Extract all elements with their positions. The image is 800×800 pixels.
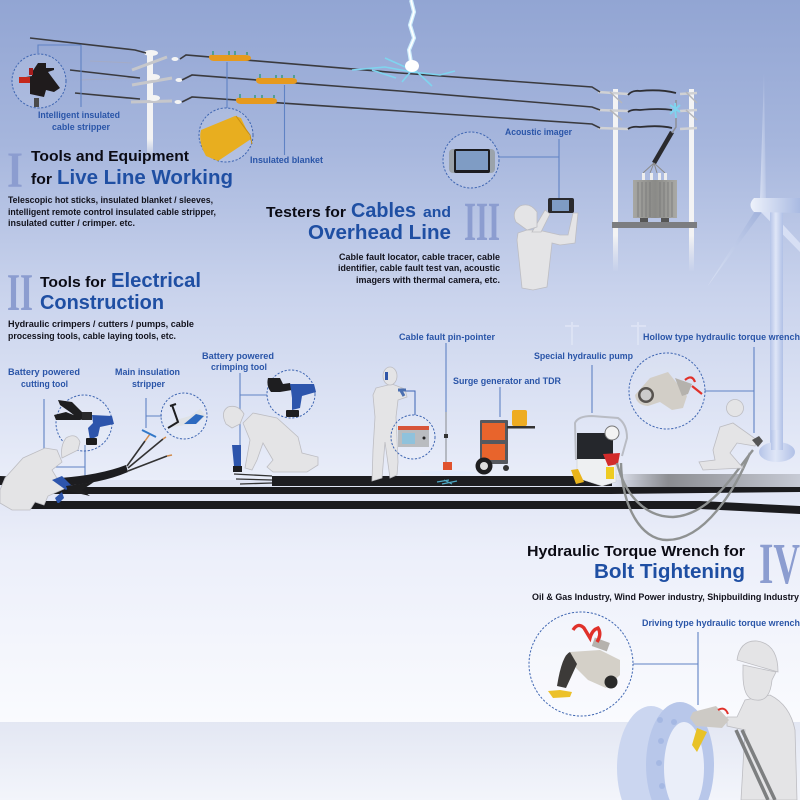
person with pin-pointer — [372, 367, 407, 481]
heading IV: Hydraulic Torque Wrench for — [527, 543, 745, 560]
heading I: I — [7, 143, 23, 199]
icon: main insulation stripper — [142, 393, 207, 439]
icon: driving type torque wrench — [529, 612, 633, 716]
icon: cable fault locator device — [391, 415, 435, 459]
label: acoustic imager: Acoustic imager — [505, 127, 572, 138]
fault spark — [437, 480, 457, 484]
bolted flange — [617, 702, 714, 800]
leader lines — [38, 45, 754, 705]
text: section I description: insulated cutter / crimper. etc. — [8, 218, 135, 229]
ground cables — [0, 434, 800, 514]
text: section II description: Hydraulic crimpers / cutters / pumps, cable — [8, 319, 194, 330]
heading III: and — [423, 204, 451, 221]
heading II: Electrical — [111, 270, 201, 292]
labels: tools row — [8, 332, 800, 390]
worker with driving wrench — [690, 641, 797, 800]
label: intelligent insulated cable stripper: Intelligent insulated — [38, 110, 120, 121]
heading I: Tools and Equipment — [31, 148, 189, 165]
icon: hollow type torque wrench — [629, 353, 705, 429]
heading I: Live Line Working — [57, 167, 233, 189]
insulated line covers — [209, 51, 297, 104]
heading III — [266, 191, 500, 252]
spark on transformer line — [670, 103, 680, 118]
right power poles — [598, 89, 697, 272]
text: section III description — [338, 252, 500, 286]
label: intelligent insulated cable stripper: cable stripper — [52, 122, 110, 133]
labels: tools row: Cable fault pin-pointer — [399, 332, 495, 343]
wind turbine — [707, 73, 800, 462]
overhead lines — [30, 38, 676, 129]
distant faint poles — [565, 322, 646, 345]
heading III: III — [464, 191, 500, 252]
person with hollow wrench — [699, 400, 763, 470]
lightning strike — [352, 0, 455, 86]
heading III: Testers for — [266, 204, 346, 221]
heading III: Cables — [351, 200, 416, 222]
labels: tools row: Battery powered — [202, 351, 274, 362]
labels: tools row: Battery powered — [8, 367, 80, 378]
text: section I description: intelligent remote control insulated cable stripper, — [8, 207, 216, 218]
text: section I description — [8, 195, 216, 229]
text: section III description: identifier, cable fault test van, acoustic — [338, 263, 500, 274]
surge generator cart — [476, 410, 535, 474]
heading IV: Bolt Tightening — [594, 561, 745, 583]
heading II: Tools for — [40, 274, 106, 291]
text: section II description — [8, 319, 194, 342]
pin-pointer probe — [420, 412, 476, 475]
hydraulic hoses — [617, 450, 753, 540]
text: section III description: Cable fault locator, cable tracer, cable — [339, 252, 500, 263]
heading II: II — [7, 264, 33, 322]
transformer — [612, 100, 697, 228]
heading II — [7, 264, 201, 322]
labels: tools row: crimping tool — [211, 362, 267, 373]
heading I — [7, 143, 233, 199]
heading I: for — [31, 171, 52, 188]
text: section III description: imagers with thermal camera, etc. — [356, 275, 500, 286]
labels: tools row: stripper — [132, 379, 165, 390]
label: intelligent insulated cable stripper — [38, 110, 120, 133]
icon: acoustic imager — [443, 132, 499, 188]
icon: insulated cable stripper — [12, 54, 66, 108]
tool in hands: cutter — [48, 476, 94, 508]
labels: tools row: Main insulation — [115, 367, 180, 378]
labels: tools row: Surge generator and TDR — [453, 376, 561, 387]
person with acoustic imager — [514, 198, 578, 290]
icon: insulated blanket — [199, 108, 253, 162]
left power pole — [80, 50, 182, 160]
heading II: Construction — [40, 292, 164, 314]
labels: tools row: cutting tool — [21, 379, 68, 390]
person cutting cable — [0, 436, 80, 510]
person crimping — [223, 406, 318, 484]
heading III: Overhead Line — [308, 222, 451, 244]
icon: battery powered crimping tool — [267, 370, 316, 418]
labels: tools row: Special hydraulic pump — [534, 351, 633, 362]
hydraulic pump — [571, 416, 627, 486]
text: section II description: processing tools, cable laying tools, etc. — [8, 331, 176, 342]
heading IV — [527, 531, 800, 596]
icon: battery powered cutting tool — [54, 395, 114, 451]
text: section I description: Telescopic hot sticks, insulated blanket / sleeves, — [8, 195, 213, 206]
label: insulated blanket: Insulated blanket — [250, 155, 324, 166]
